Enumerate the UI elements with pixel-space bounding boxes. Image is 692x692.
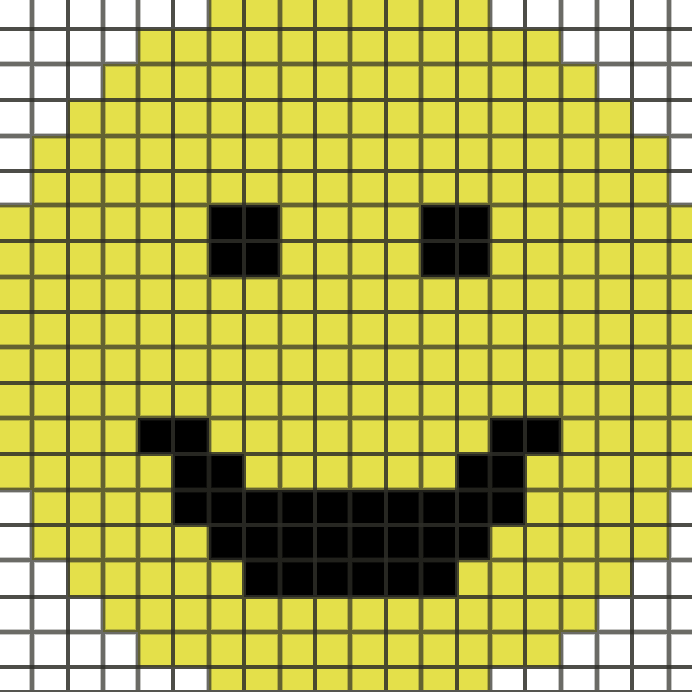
right eye <box>421 205 490 277</box>
left eye <box>209 205 280 277</box>
bottom edge <box>0 690 692 692</box>
smile: black pixels <box>138 418 561 597</box>
